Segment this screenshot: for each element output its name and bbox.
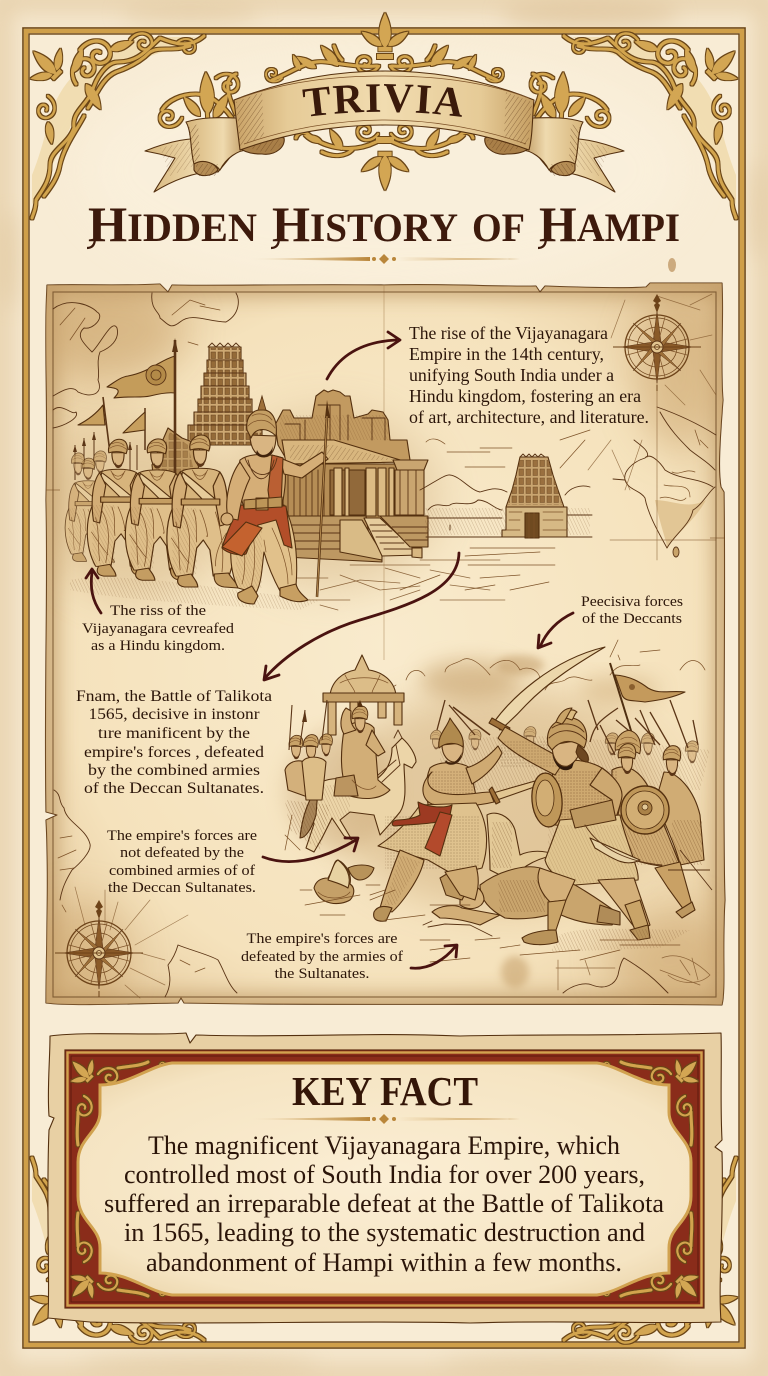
map: peninsula (588, 294, 716, 560)
key fact body text: The magnificent Vijayanagara Empire, which (148, 1131, 620, 1160)
fallen helmet and bowls (300, 860, 385, 915)
pavilion (323, 655, 404, 735)
text block: rise of the empire: The rise of the Vijayanagara (409, 323, 608, 343)
main temple (275, 390, 428, 562)
text block: Battle of Talikota: 1565, decisive in instonr (88, 706, 260, 723)
cream inner panel (78, 1063, 691, 1295)
text block: rise of the empire (409, 323, 649, 427)
arrow: to rise of empire text (327, 332, 400, 379)
text block: Battle of Talikota: Fnam, the Battle of Talikota (76, 688, 272, 705)
text block: Battle of Talikota: of the Deccan Sultanates. (84, 780, 264, 797)
left fighter (374, 707, 537, 921)
key fact body text: abandonment of Hampi within a few months. (146, 1248, 622, 1277)
caption: soldiers (82, 603, 235, 654)
caption: defeated by the Sultanates (241, 931, 403, 982)
arrow: to Deccan forces (538, 613, 573, 648)
side flourish (162, 74, 236, 120)
flags and poles (73, 338, 178, 520)
map: bottom-right coast (556, 956, 710, 993)
red ornamental frame (61, 1050, 708, 1308)
caption: Deccan forces: of the Deccants (582, 611, 682, 627)
heading divider (248, 254, 520, 264)
text block: rise of the empire: of art, architecture, and literature. (409, 407, 649, 427)
caption: defeated by the Sultanates: defeated by the armies of (241, 949, 403, 965)
panel: history parchment (30, 280, 730, 1020)
smoke clouds (378, 640, 705, 695)
ground lines (70, 560, 505, 610)
fallen warrior (423, 813, 620, 936)
ground hatching (370, 890, 690, 962)
illustration: Vijayanagara king, soldiers and temples (65, 338, 592, 610)
title banner ornament (159, 13, 610, 190)
background crowd right (430, 663, 710, 790)
caption: soldiers: as a Hindu kingdom. (91, 638, 225, 654)
text block: Battle of Talikota: by the combined armies (88, 762, 260, 779)
key fact divider (248, 1114, 520, 1124)
ribbon folds (240, 134, 284, 154)
caption: not defeated: the Deccan Sultanates. (108, 880, 256, 896)
background footmen (285, 700, 332, 850)
rider and horse (300, 700, 416, 852)
caption: Deccan forces: Peecisiva forces (581, 594, 683, 610)
caption: not defeated: not defeated by the (120, 845, 244, 861)
temple gopuram tower (152, 342, 263, 475)
arrow: temple to battle text (264, 553, 459, 680)
right fighter (489, 647, 662, 945)
map: left mid coast (54, 790, 237, 998)
arrow: to fighter (263, 838, 358, 862)
text block: rise of the empire: Hindu kingdom, fostering an era (409, 386, 641, 406)
text block: rise of the empire: unifying South India under a (409, 365, 614, 385)
main heading: HIDDEN (88, 196, 257, 252)
panel: key fact (48, 1033, 722, 1323)
text block: Battle of Talikota (76, 688, 272, 797)
key fact body text: in 1565, leading to the systematic destruction and (124, 1218, 645, 1247)
arrow: to fallen warrior (411, 945, 457, 968)
main heading: HAMPI (539, 196, 680, 252)
attendant soldiers (65, 435, 238, 588)
illustration: Battle of Talikota (285, 640, 712, 962)
lower ornament (296, 132, 376, 156)
main heading: HISTORY (272, 196, 458, 252)
caption: soldiers: The riss of the (110, 603, 206, 619)
key fact heading: KEY FACT (292, 1068, 478, 1114)
main heading: OF (472, 205, 525, 250)
caption: not defeated (107, 828, 257, 896)
map: top-left coast (53, 293, 238, 428)
right tail (521, 118, 624, 192)
key fact body text: suffered an irreparable defeat at the Battle of Talikota (104, 1189, 664, 1218)
caption: defeated by the Sultanates: the Sultanates. (274, 966, 370, 982)
left tail (145, 118, 248, 192)
key fact parchment (48, 1033, 722, 1323)
title ribbon (144, 70, 624, 192)
text block: Battle of Talikota: empire's forces , defeated (84, 744, 264, 761)
king figure (221, 396, 330, 604)
caption: defeated by the Sultanates: The empire's forces are (246, 931, 398, 947)
right soldiers with shield (610, 730, 712, 918)
icon: compass rose top (613, 294, 701, 391)
ribbon centre band (234, 71, 534, 150)
title text: TRIVIA (302, 84, 462, 117)
text block: Battle of Talikota: tıre manificent by the (98, 725, 250, 742)
caption: soldiers: Vijayanagara cevreafed (82, 621, 235, 637)
caption: Deccan forces (581, 594, 683, 627)
arrow: to soldiers (86, 569, 101, 613)
main heading (87, 196, 680, 252)
distant hills, small gopuram (400, 430, 592, 590)
key fact body text (104, 1131, 664, 1277)
icon: compass rose bottom (55, 900, 143, 997)
caption: not defeated: combined armies of of (109, 863, 255, 879)
caption: not defeated: The empire's forces are (107, 828, 257, 844)
text block: rise of the empire: Empire in the 14th century, (409, 344, 604, 364)
key fact body text: controlled most of South India for over 200 years, (124, 1160, 645, 1189)
